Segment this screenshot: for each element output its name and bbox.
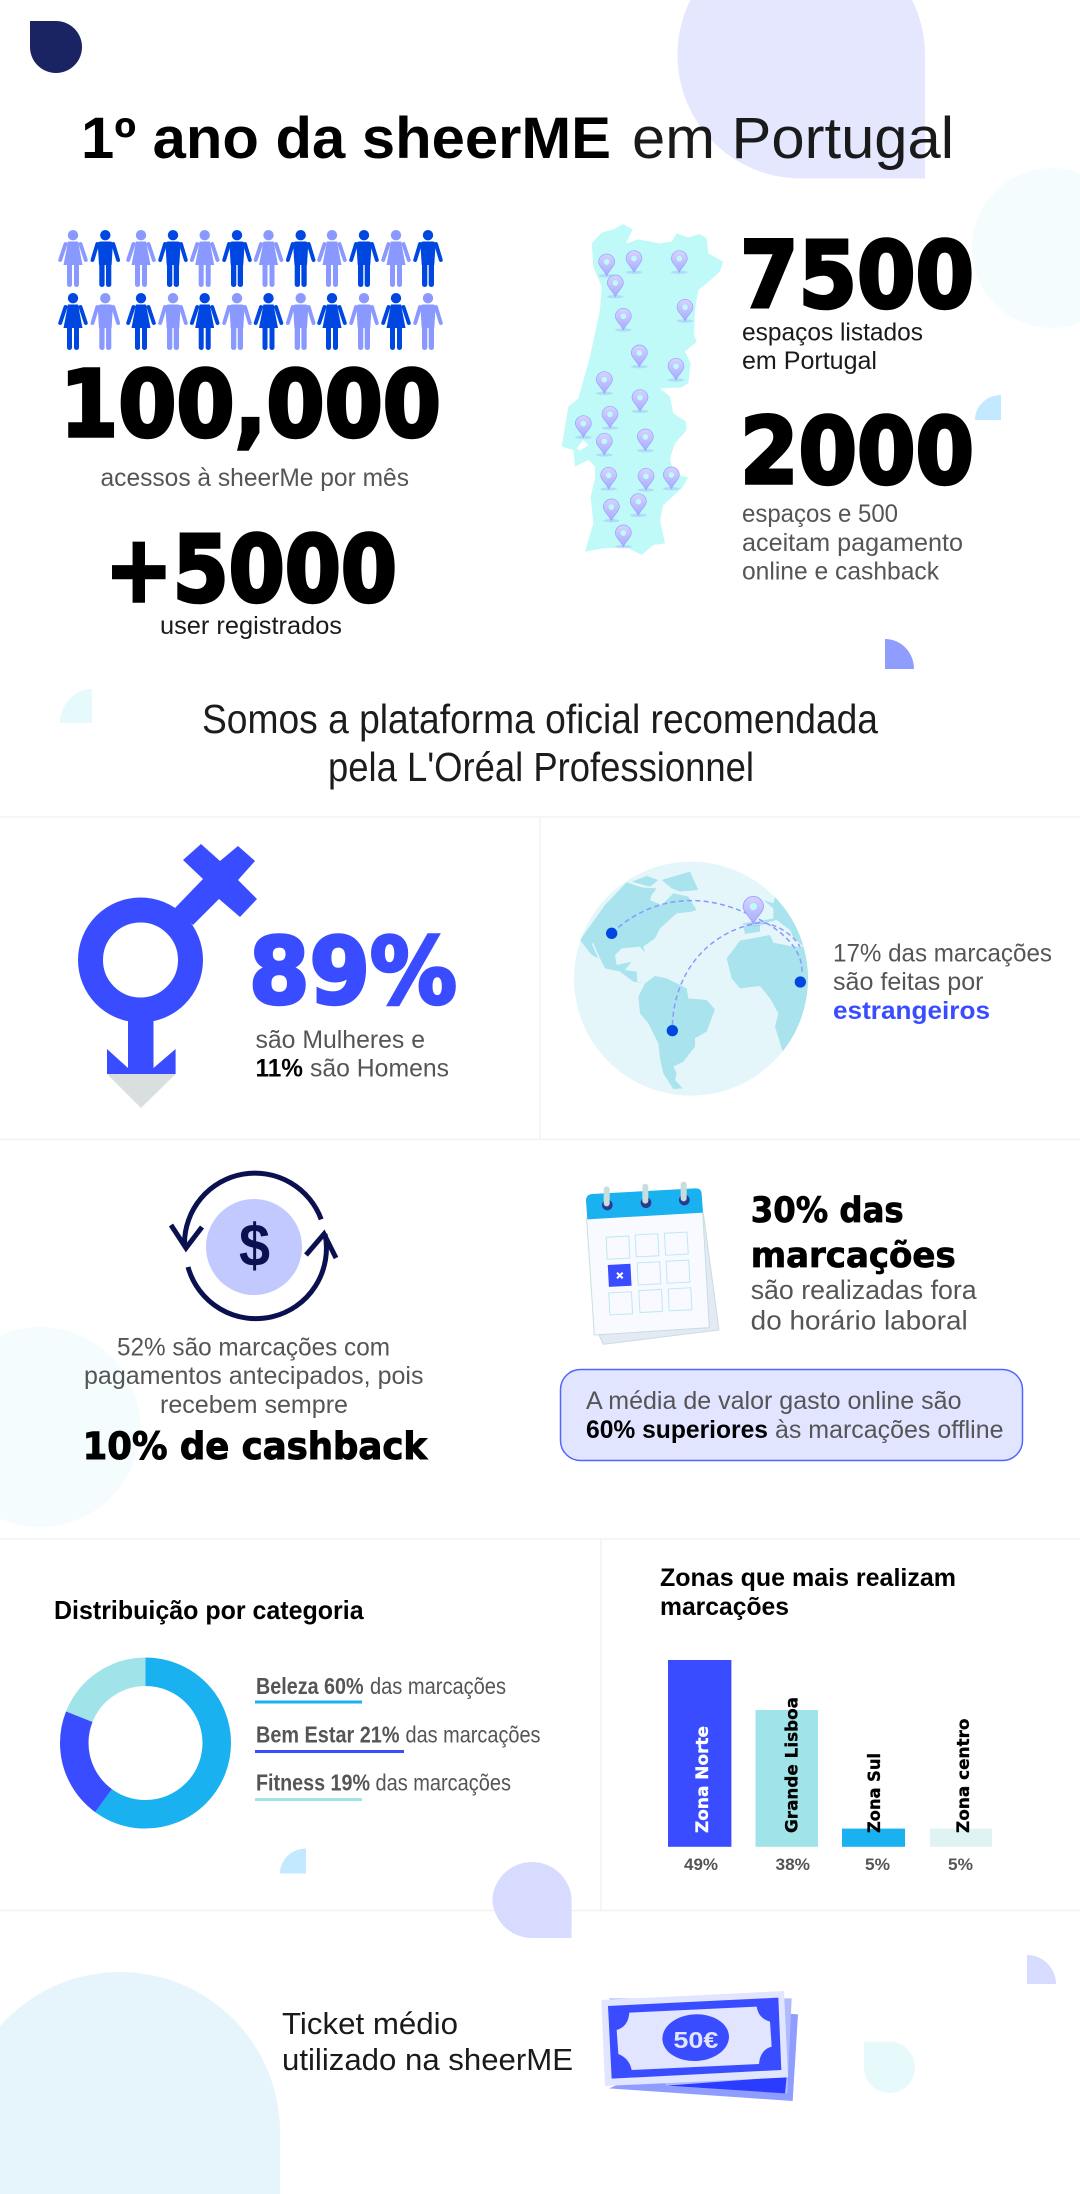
decorative background shape: large pale blue arch <box>0 1972 280 2194</box>
logo mark <box>30 21 82 73</box>
decorative quarter shape: light blue <box>975 395 1001 420</box>
icon: cashback dollar with arrows: $ <box>239 1212 270 1279</box>
chart: zones bar chart: 49% <box>684 1855 718 1874</box>
legend: categories <box>255 1673 540 1801</box>
heading: distribution by category: Distribuição por categoria <box>54 1595 364 1625</box>
chart: zones bar chart <box>668 1660 992 1874</box>
chart: zones bar chart: 5% <box>865 1855 890 1874</box>
legend: categories: das marcações <box>370 1673 506 1699</box>
decorative background shape: pale circle left <box>0 1327 140 1527</box>
chart: zones bar chart: 38% <box>776 1855 810 1874</box>
caption: foreign bookings: 17% das marcações <box>833 939 1052 967</box>
heading: official L'Oréal platform: pela L'Oréal Professionnel <box>328 744 754 790</box>
chart: zones bar chart: Zona Norte <box>693 1726 713 1833</box>
icon: world globe with routes <box>574 862 817 1096</box>
caption: prepaid bookings: pagamentos antecipados, pois <box>84 1362 424 1390</box>
text: 30% of bookings <box>751 1191 978 1336</box>
chart: zones bar chart: Zona Sul <box>865 1753 885 1833</box>
title: em Portugal <box>632 106 954 171</box>
callout: online spend: A média de valor gasto online são <box>586 1387 962 1415</box>
text: average ticket: utilizado na sheerME <box>282 2042 573 2077</box>
heading: official L'Oréal platform: Somos a plataforma oficial recomendada <box>202 696 878 742</box>
text: 30% of bookings: do horário laboral <box>751 1306 968 1336</box>
callout: online spend: às marcações offline <box>775 1416 1004 1444</box>
stat: 2000: 2000 <box>740 398 974 505</box>
text: 30% of bookings: 30% das <box>751 1191 904 1231</box>
chart: zones bar chart: 5% <box>948 1855 973 1874</box>
chart: category donut <box>74 1672 217 1814</box>
heading: official L'Oréal platform <box>202 696 878 790</box>
stat: 89%: 89% <box>249 918 457 1025</box>
text: average ticket <box>282 2006 573 2077</box>
caption: listed spaces: em Portugal <box>742 347 877 375</box>
title <box>81 106 954 171</box>
caption: online payment spaces: online e cashback <box>742 558 939 586</box>
decorative quarter shape: lavender right <box>1027 1955 1056 1984</box>
caption: women and men split <box>256 1026 449 1082</box>
heading: top zones: Zonas que mais realizam <box>660 1564 956 1592</box>
callout: online spend <box>560 1370 1022 1460</box>
caption: prepaid bookings: 52% são marcações com <box>117 1333 390 1361</box>
decorative quarter shape: periwinkle <box>885 639 914 669</box>
legend: categories: das marcações <box>406 1722 540 1748</box>
decorative quarter shape: light blue lower <box>280 1848 306 1874</box>
caption: listed spaces: espaços listados <box>742 319 923 347</box>
caption: prepaid bookings: recebem sempre <box>160 1391 348 1419</box>
chart: zones bar chart: Grande Lisboa <box>782 1697 802 1833</box>
map of Portugal with pins <box>562 224 723 555</box>
caption: online payment spaces: espaços e 500 <box>742 500 898 528</box>
text: 30% of bookings: são realizadas fora <box>751 1275 978 1305</box>
icon: 50 euro banknotes <box>601 1991 798 2101</box>
heading: top zones: marcações <box>660 1593 789 1621</box>
title: 1º ano da sheerME <box>81 106 611 171</box>
decorative drop shape: lavender lower <box>492 1862 572 1938</box>
stat: 7500: 7500 <box>740 222 974 329</box>
icon: calendar <box>586 1185 719 1344</box>
chart: zones bar chart: Zona centro <box>954 1718 974 1833</box>
caption: foreign bookings <box>833 939 1052 1025</box>
icon: 50 euro banknotes: 50€ <box>673 2027 718 2053</box>
text: average ticket: Ticket médio <box>282 2006 458 2041</box>
caption: foreign bookings: são feitas por <box>833 968 984 996</box>
decorative background shape: large lavender drop <box>678 0 925 179</box>
caption: prepaid bookings <box>84 1333 424 1419</box>
caption: online payment spaces <box>742 500 963 586</box>
decorative drop shape: pale cyan <box>864 2042 915 2093</box>
legend: categories: Bem Estar 21% <box>256 1722 400 1748</box>
caption: women and men split: são Homens <box>310 1054 449 1082</box>
icon: gender symbol <box>90 844 257 1108</box>
caption: registered users: user registrados <box>160 612 342 640</box>
stat: +5000: +5000 <box>105 516 397 623</box>
stat: 10% cashback: 10% de cashback <box>83 1425 428 1468</box>
legend: categories: Fitness 19% <box>256 1770 370 1796</box>
icon: cashback dollar with arrows <box>171 1173 336 1319</box>
heading: top zones <box>660 1564 956 1621</box>
text: 30% of bookings: marcações <box>751 1236 956 1276</box>
decorative quarter shape: pale cyan <box>60 689 92 723</box>
stat: 100,000: 100,000 <box>60 351 441 458</box>
caption: listed spaces <box>742 319 923 375</box>
icon: people pictogram rows <box>60 230 441 350</box>
caption: women and men split: são Mulheres e <box>256 1026 425 1054</box>
caption: women and men split: 11% <box>256 1054 303 1082</box>
caption: monthly accesses: acessos à sheerMe por mês <box>100 464 409 492</box>
decorative background shape: pale circle right <box>972 168 1080 328</box>
caption: foreign bookings: estrangeiros <box>833 997 990 1025</box>
callout: online spend: 60% superiores <box>586 1416 768 1444</box>
legend: categories: das marcações <box>376 1770 511 1796</box>
legend: categories: Beleza 60% <box>256 1673 364 1699</box>
caption: online payment spaces: aceitam pagamento <box>742 529 963 557</box>
